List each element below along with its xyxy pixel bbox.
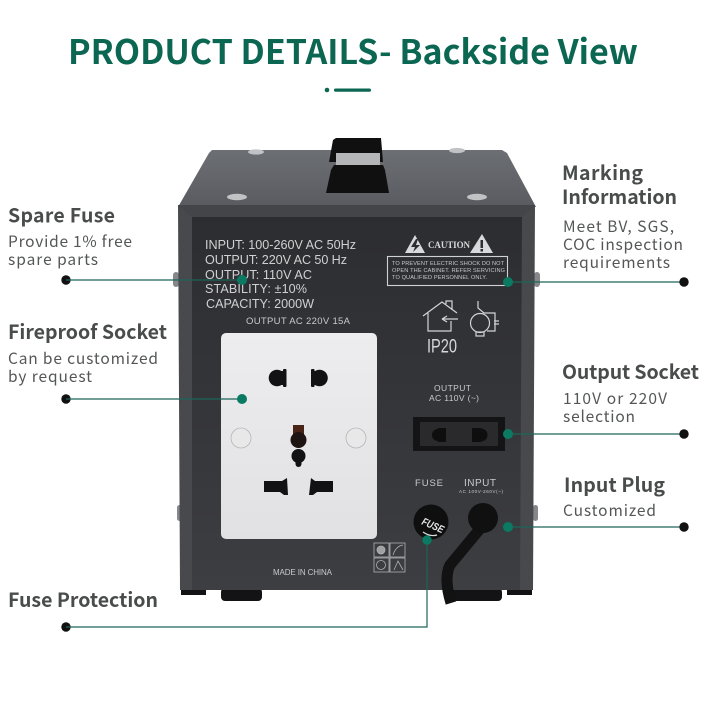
callout: fuse protection: Fuse Protection: [8, 584, 158, 613]
icon: IP20 house and motor symbols: [423, 301, 499, 358]
110V socket label: OUTPUT: [434, 383, 471, 393]
side bolts: [173, 272, 540, 521]
input plug: AC 100V-260V(~): [459, 489, 504, 494]
plate screw covers: [231, 428, 366, 448]
specifications text: OUTPUT: 220V AC 50 Hz: [205, 253, 347, 267]
caution label: CAUTION: [428, 240, 470, 250]
callout: output socket: 110V or 220V: [563, 387, 667, 409]
top surface: [178, 150, 536, 207]
110V socket label: AC 110V (~): [429, 393, 479, 403]
socket plate: [221, 333, 377, 539]
specifications text: INPUT: 100-260V AC 50Hz: [205, 238, 356, 252]
input plug: INPUT: [464, 478, 496, 489]
callout: fireproof socket: [8, 316, 247, 404]
callout: fireproof socket: by request: [8, 365, 92, 387]
110V output socket: [413, 417, 505, 451]
callout: input plug: Customized: [563, 499, 656, 521]
fuse holder: FUSE: [415, 478, 443, 489]
front casing: [178, 205, 535, 590]
top screws: [227, 148, 487, 200]
front inner panel: [192, 217, 522, 590]
callout: output socket: selection: [563, 405, 635, 427]
callout: marking information: [503, 157, 689, 287]
certification icons: [374, 543, 405, 572]
110V socket label: [429, 383, 479, 403]
callout: fireproof socket: Can be customized: [8, 347, 158, 369]
socket rating text: OUTPUT AC 220V 15A: [246, 316, 351, 327]
callout: spare fuse: Provide 1% free: [8, 230, 132, 252]
title: PRODUCT DETAILS- Backside View: [68, 25, 638, 74]
callout: marking information: Information: [562, 181, 677, 210]
callout: input plug: Input Plug: [564, 469, 665, 498]
icon: IP20 house and motor symbols: IP20: [427, 336, 457, 358]
callout: output socket: Output Socket: [562, 356, 699, 385]
fuse holder: [414, 478, 448, 540]
callout: spare fuse: Spare Fuse: [8, 200, 115, 228]
callout: output socket: [503, 356, 699, 439]
specifications text: CAPACITY: 2000W: [206, 297, 314, 311]
fuse holder: FUSE: [420, 516, 446, 536]
rubber feet: [181, 588, 532, 601]
callout: spare fuse: spare parts: [8, 248, 98, 270]
input plug: [447, 478, 504, 603]
title underline accent: [325, 88, 371, 92]
product: voltage converter backside: [173, 138, 540, 603]
callout: marking information: Meet BV, SGS,: [563, 215, 674, 237]
callout: input plug: [503, 469, 689, 532]
callout: marking information: Marking: [562, 157, 643, 186]
specifications text: [205, 238, 356, 311]
specifications text: STABILITY: ±10%: [205, 282, 307, 296]
carry handle: [326, 138, 389, 193]
top bevel: [178, 205, 535, 217]
callout: marking information: COC inspection: [563, 233, 683, 255]
made in china text: MADE IN CHINA: [273, 568, 333, 577]
socket holes: [264, 369, 333, 495]
caution label: OPEN THE CABINET. REFER SERVICING: [392, 268, 505, 274]
callout: fuse protection: [8, 535, 432, 632]
specifications text: OUTPUT: 110V AC: [205, 268, 312, 282]
caution label: TO PREVENT ELECTRIC SHOCK DO NOT: [392, 261, 505, 267]
callout: fireproof socket: Fireproof Socket: [8, 316, 167, 345]
callout: spare fuse: [8, 200, 247, 285]
caution label: [388, 234, 508, 286]
callout: marking information: requirements: [563, 251, 670, 273]
caution label: TO QUALIFIED PERSONNEL ONLY.: [392, 275, 487, 281]
